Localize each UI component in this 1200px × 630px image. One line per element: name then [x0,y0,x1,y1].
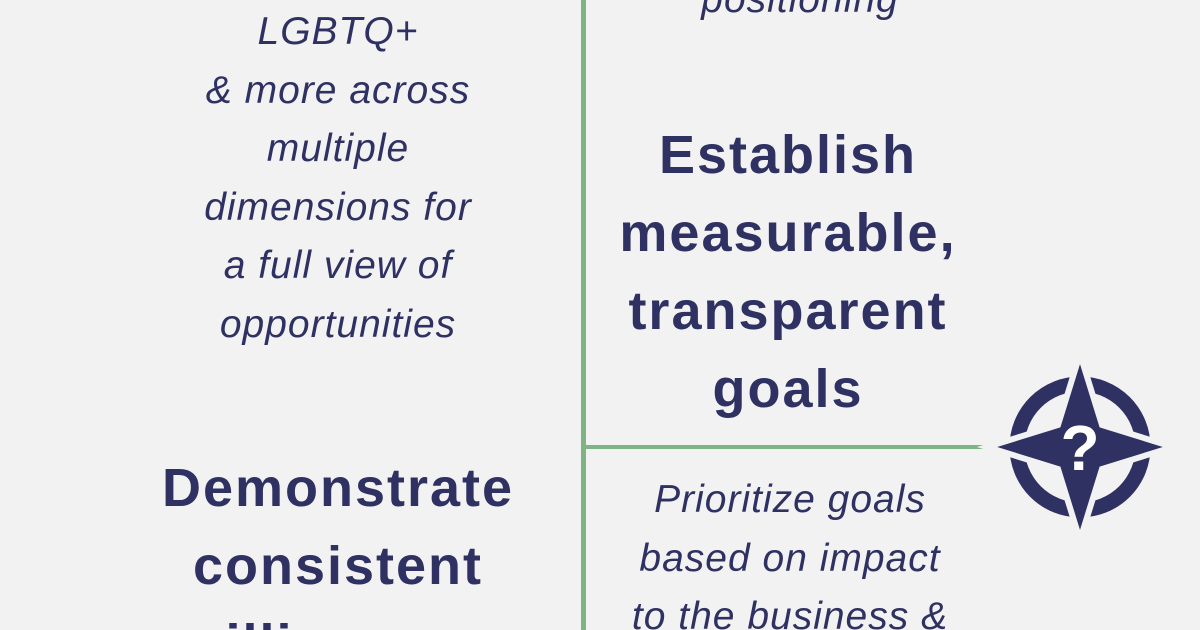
heading: establish goals [619,125,957,419]
heading: demonstrate: consistent [193,536,483,596]
icon: compass [977,364,1163,530]
text: left top italic: & more across [206,68,470,112]
text: left top italic: dimensions for [204,186,472,228]
text: left top italic: opportunities [220,302,456,346]
heading: establish goals: measurable, [619,203,957,263]
vertical divider [581,0,586,630]
text: prioritize goals: based on impact [639,536,941,580]
heading: demonstrate [162,458,514,630]
text: prioritize goals [632,478,948,630]
text: left top italic: a full view of [224,244,452,287]
text: left top italic: LGBTQ+ [258,10,418,53]
text: prioritize goals: Prioritize goals [654,478,926,521]
heading: demonstrate: Demonstrate [162,458,514,518]
text: left top italic [204,10,472,346]
text: left top italic: multiple [267,127,409,170]
heading: establish goals: goals [712,359,864,419]
heading: establish goals: transparent [628,281,948,341]
heading: establish goals: Establish [659,125,917,185]
icon: compass: ? [1060,412,1100,484]
horizontal divider [581,445,1001,449]
